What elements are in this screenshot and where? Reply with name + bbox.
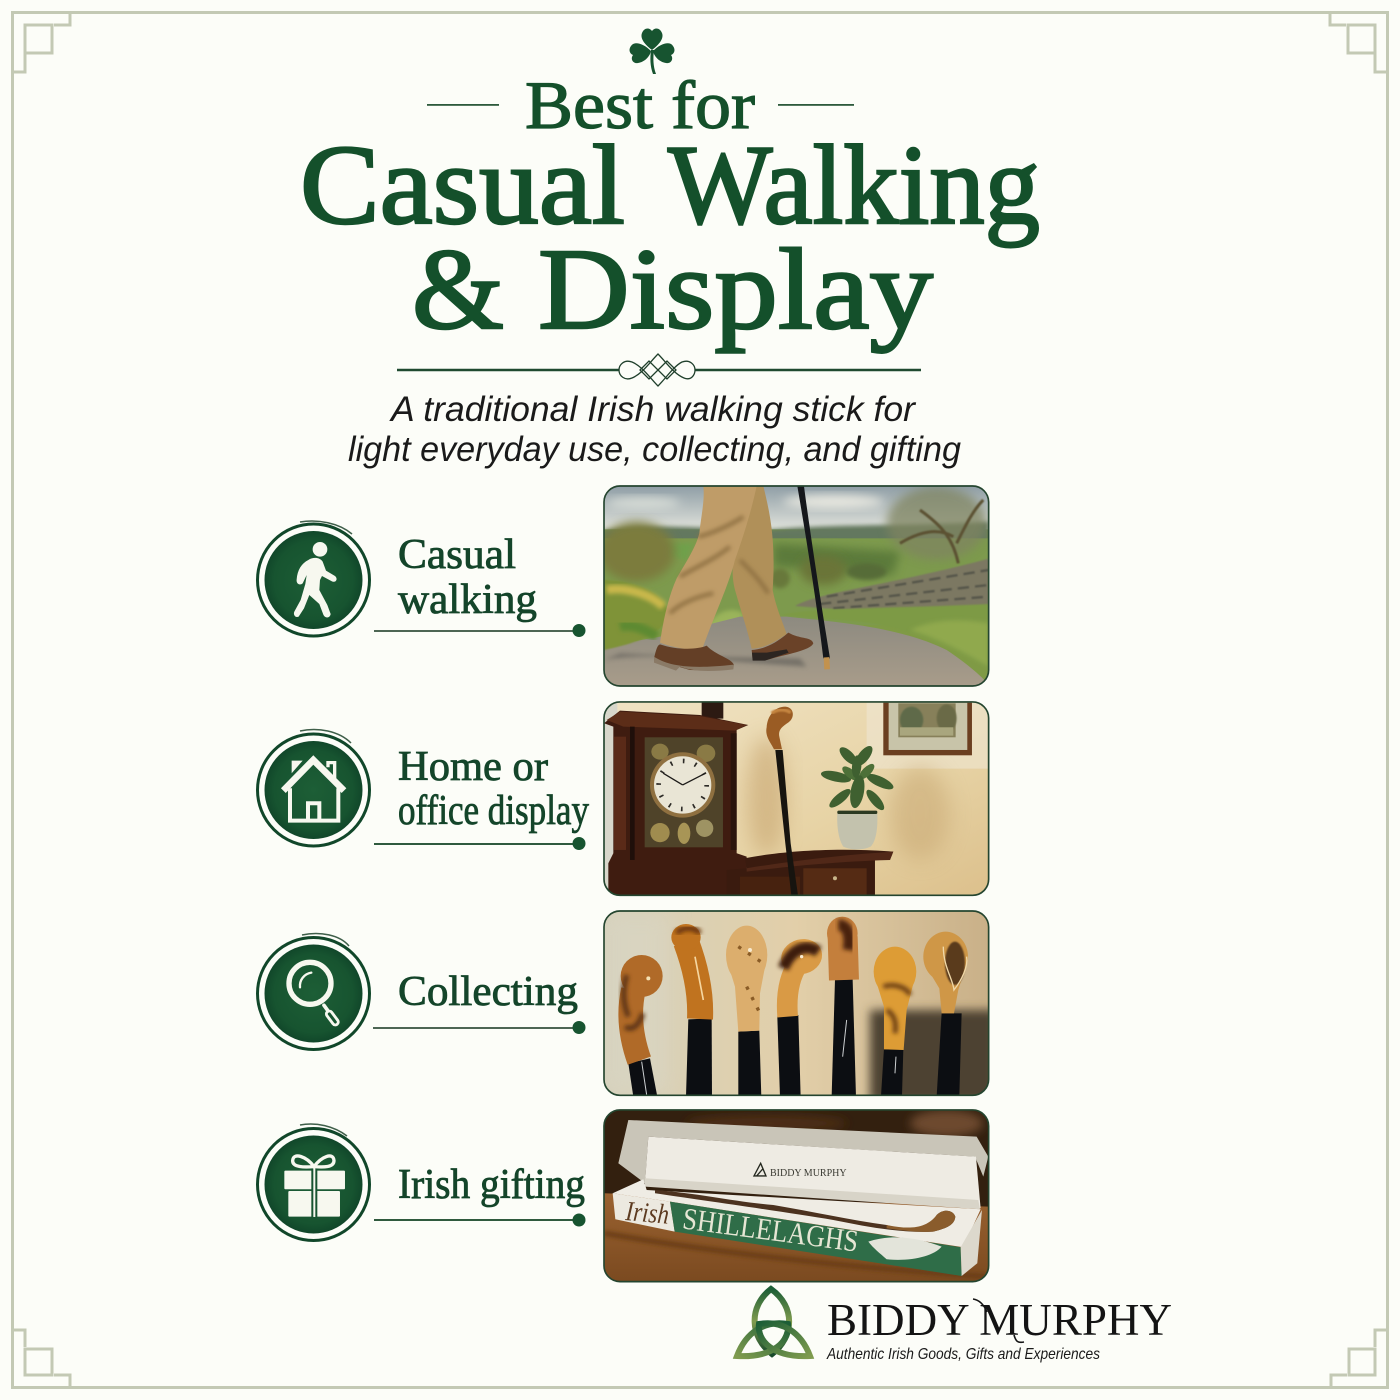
icon: triquetra: [737, 1289, 810, 1356]
divider with Celtic knot: [397, 354, 921, 386]
photo: clock, stick and plant on a sideboard: [604, 702, 989, 895]
subtitle: light everyday use, collecting, and gifting: [348, 430, 962, 469]
row: collecting: [258, 933, 586, 1050]
photo: walker on a country lane: [598, 486, 989, 686]
wordmark: BIDDY MURPHY: [827, 1295, 1172, 1345]
label: Home or office display: office display: [398, 788, 589, 834]
logo: Biddy Murphy: [737, 1289, 1172, 1363]
row: home or office display: [258, 730, 589, 850]
leader line: [374, 624, 586, 637]
heading: & Display: &: [412, 226, 504, 354]
leader line: [374, 837, 586, 850]
photo: gift box with shillelagh: [604, 1110, 989, 1282]
icon: gift box: [258, 1124, 370, 1240]
label: Collecting: Collecting: [398, 969, 578, 1015]
icon: magnifying glass: [258, 933, 370, 1050]
subtitle: [348, 390, 962, 469]
row: casual walking: [258, 521, 586, 637]
photo: gift box with shillelagh: Irish: [624, 1196, 670, 1231]
icon: walking person: [258, 521, 370, 636]
photo: seven shillelagh handles: [604, 911, 997, 1103]
label: Casual walking: [398, 532, 537, 623]
label: Irish gifting: Irish gifting: [398, 1162, 585, 1208]
icon: shamrock: [630, 29, 674, 74]
label: Casual walking: walking: [398, 577, 537, 623]
subtitle: A traditional Irish walking stick for: [389, 390, 916, 429]
heading: Casual Walking: Casual: [300, 123, 625, 248]
leader line: [373, 1021, 586, 1034]
label: Home or office display: Home or: [398, 744, 548, 790]
label: Casual walking: Casual: [398, 532, 516, 578]
heading: & Display: [412, 226, 933, 354]
heading: Casual Walking: [300, 123, 1040, 248]
tagline: Authentic Irish Goods, Gifts and Experiences: [826, 1346, 1100, 1363]
row: Irish gifting: [258, 1124, 586, 1240]
leader line: [374, 1214, 586, 1226]
heading: Best for: Best for: [525, 67, 755, 143]
heading: Casual Walking: Walking: [668, 123, 1040, 248]
heading: & Display: Display: [538, 226, 933, 354]
label: Home or office display: [398, 744, 589, 834]
photo: gift box with shillelagh: BIDDY MURPHY: [770, 1168, 847, 1179]
photo: gift box with shillelagh: SHILLELAGHS: [681, 1202, 860, 1259]
flourish on the M: [973, 1299, 1024, 1342]
icon: house: [258, 730, 370, 846]
